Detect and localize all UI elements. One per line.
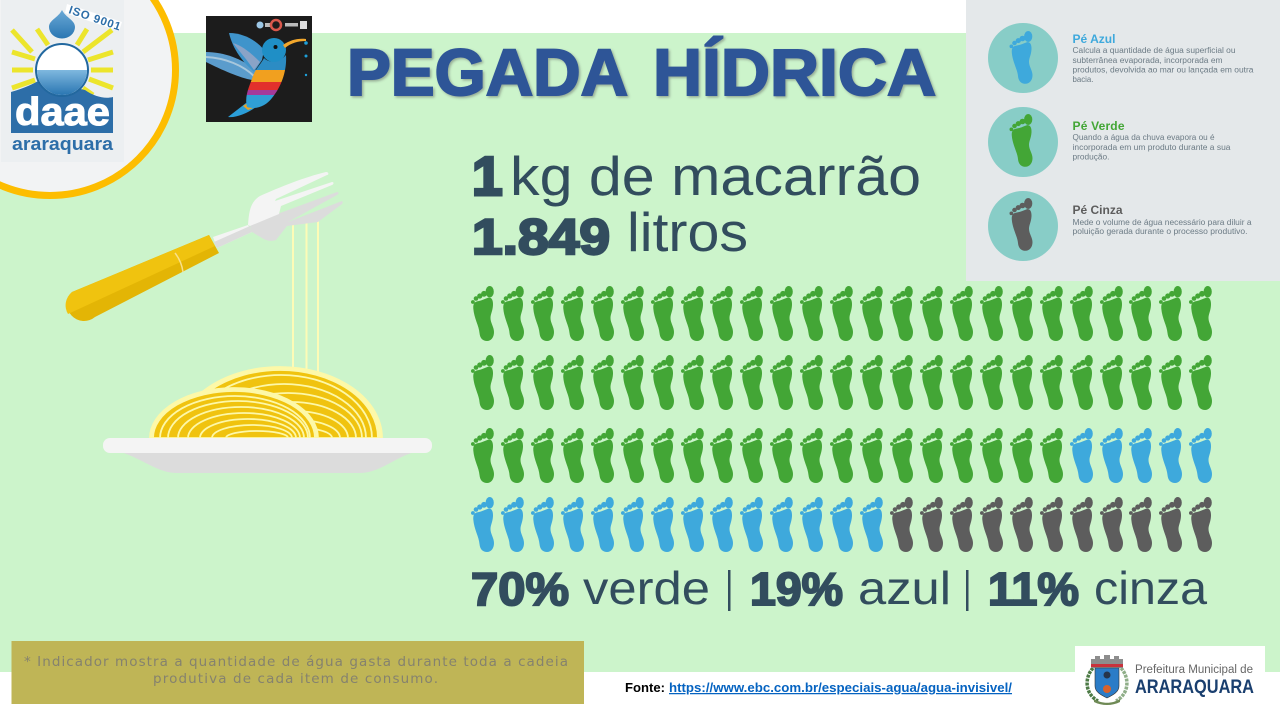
legend: pé azul: bacia.	[1072, 75, 1094, 84]
panel: footprint legend	[966, 0, 1280, 281]
legend: pé verde: Pé Verde	[1072, 119, 1125, 133]
percentages summary: cinza	[1094, 562, 1207, 614]
logo: prefeitura municipal de araraquara: ARARAQUARA	[1135, 676, 1254, 698]
panel: daae logo badge	[0, 0, 176, 196]
title: HÍDRICA	[653, 35, 936, 109]
source line: Fonte:	[625, 681, 665, 695]
legend: pé verde	[988, 107, 1231, 177]
illustration: plate of spaghetti	[103, 367, 432, 473]
illustration: fork with pasta strands	[66, 172, 343, 380]
pictogram row 3: green and blue footprints	[471, 428, 1212, 483]
logo: daae araraquara: daae	[15, 91, 110, 134]
pictogram row 1: green footprints	[471, 286, 1212, 341]
pictogram row 4: blue and grey footprints	[471, 497, 1212, 552]
logo: daae araraquara: ISO 9001	[67, 4, 123, 34]
percentages summary: verde	[583, 562, 710, 614]
pictogram row 2: green footprints	[471, 355, 1212, 410]
headline: 1.849 litros: litros	[627, 201, 748, 263]
title: PEGADA	[347, 35, 628, 109]
headline: 1.849 litros	[472, 201, 748, 265]
logo: prefeitura municipal de araraquara	[1075, 646, 1265, 718]
legend: pé azul: Pé Azul	[1072, 32, 1116, 46]
footnote box: produtiva de cada item de consumo.	[153, 671, 438, 687]
legend: pé verde: produção.	[1072, 152, 1110, 162]
legend: pé cinza: Pé Cinza	[1072, 203, 1123, 217]
legend: pé azul: produtos, devolvida ao mar ou lançada em outra	[1072, 66, 1254, 74]
headline: 1.849 litros: 1.849	[472, 209, 610, 265]
percentages summary	[471, 562, 1207, 615]
legend: pé cinza: Mede o volume de água necessário para diluir a	[1072, 218, 1252, 227]
legend: pé cinza: poluição gerada durante o processo produtivo.	[1072, 227, 1248, 236]
legend: pé azul	[988, 23, 1254, 93]
footnote box	[12, 641, 584, 704]
percentages summary: azul	[858, 562, 951, 614]
logo: daae araraquara: araraquara	[12, 134, 114, 154]
image: hummingbird	[206, 16, 312, 122]
headline: 1kg de macarrão: kg de macarrão	[510, 145, 921, 207]
legend: pé verde: incorporada em um produto durante a sua	[1072, 143, 1231, 152]
legend: pé azul: subterrânea evaporada, incorporada em	[1072, 56, 1223, 65]
headline: 1kg de macarrão: 1	[472, 145, 503, 207]
logo: daae araraquara	[1, 0, 124, 162]
percentages summary: 11%	[988, 563, 1079, 615]
legend: pé azul: Calcula a quantidade de água superficial ou	[1072, 46, 1236, 55]
legend: pé verde: Quando a água da chuva evapora ou é	[1072, 133, 1215, 142]
legend: pé cinza	[988, 191, 1252, 261]
percentages summary: 70%	[471, 563, 569, 615]
logo: prefeitura municipal de araraquara: Prefeitura Municipal de	[1135, 664, 1253, 676]
footnote box: * Indicador mostra a quantidade de água gasta durante toda a cadeia	[24, 654, 568, 670]
percentages summary: 19%	[750, 563, 843, 615]
source line: https://www.ebc.com.br/especiais-agua/agua-invisivel/	[669, 681, 1013, 695]
